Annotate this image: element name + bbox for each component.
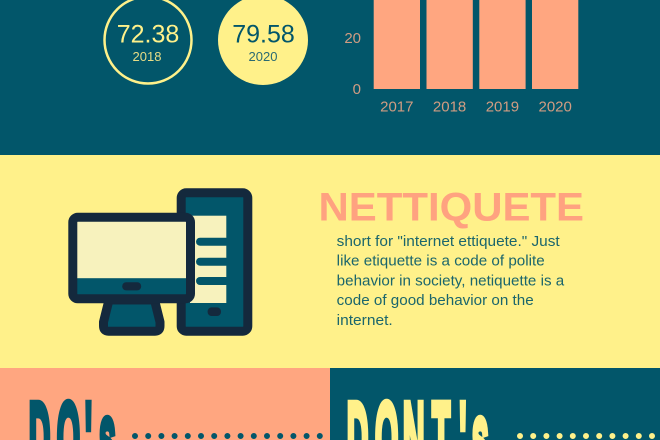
stat circle: 2018: 72.38: [117, 21, 179, 49]
panel: nettiquete: [0, 155, 660, 368]
bar chart: 20: [344, 30, 361, 47]
text block: definition: like etiquette is a code of polite: [337, 254, 545, 270]
dotted leader: do's: [135, 433, 322, 439]
stat circle: 2018: 2018: [133, 49, 161, 64]
bar chart: 2018: [433, 99, 466, 116]
icon: tower: [181, 193, 248, 331]
text block: definition: [337, 234, 565, 329]
icon: desktop computer: [73, 193, 248, 331]
stat circle: 2018: [104, 0, 192, 84]
panel: dont's: [330, 368, 660, 440]
text block: definition: internet.: [337, 313, 393, 329]
bar chart: 2017: [380, 99, 413, 116]
text block: definition: short for "internet ettiquete." Just: [337, 234, 560, 250]
panel: statistics: [0, 0, 660, 155]
text block: definition: code of good behavior on the: [337, 293, 534, 309]
stat circle: 2020: 79.58: [232, 21, 295, 49]
icon: monitor: [73, 217, 190, 299]
text block: definition: behavior in society, netiquette is a: [337, 273, 565, 289]
bar chart: 0: [353, 81, 361, 98]
bar chart: 2019: [486, 99, 519, 116]
bar chart: [344, 0, 578, 116]
icon: monitor stand: [104, 300, 160, 331]
stat circle: 2020: 2020: [249, 49, 277, 64]
bar chart: 2020: [539, 99, 572, 116]
heading: NETTIQUETE: [318, 186, 584, 230]
dotted leader: dont's: [520, 433, 654, 439]
stat circle: 2020: [218, 0, 308, 85]
panel: do's: [0, 368, 330, 440]
